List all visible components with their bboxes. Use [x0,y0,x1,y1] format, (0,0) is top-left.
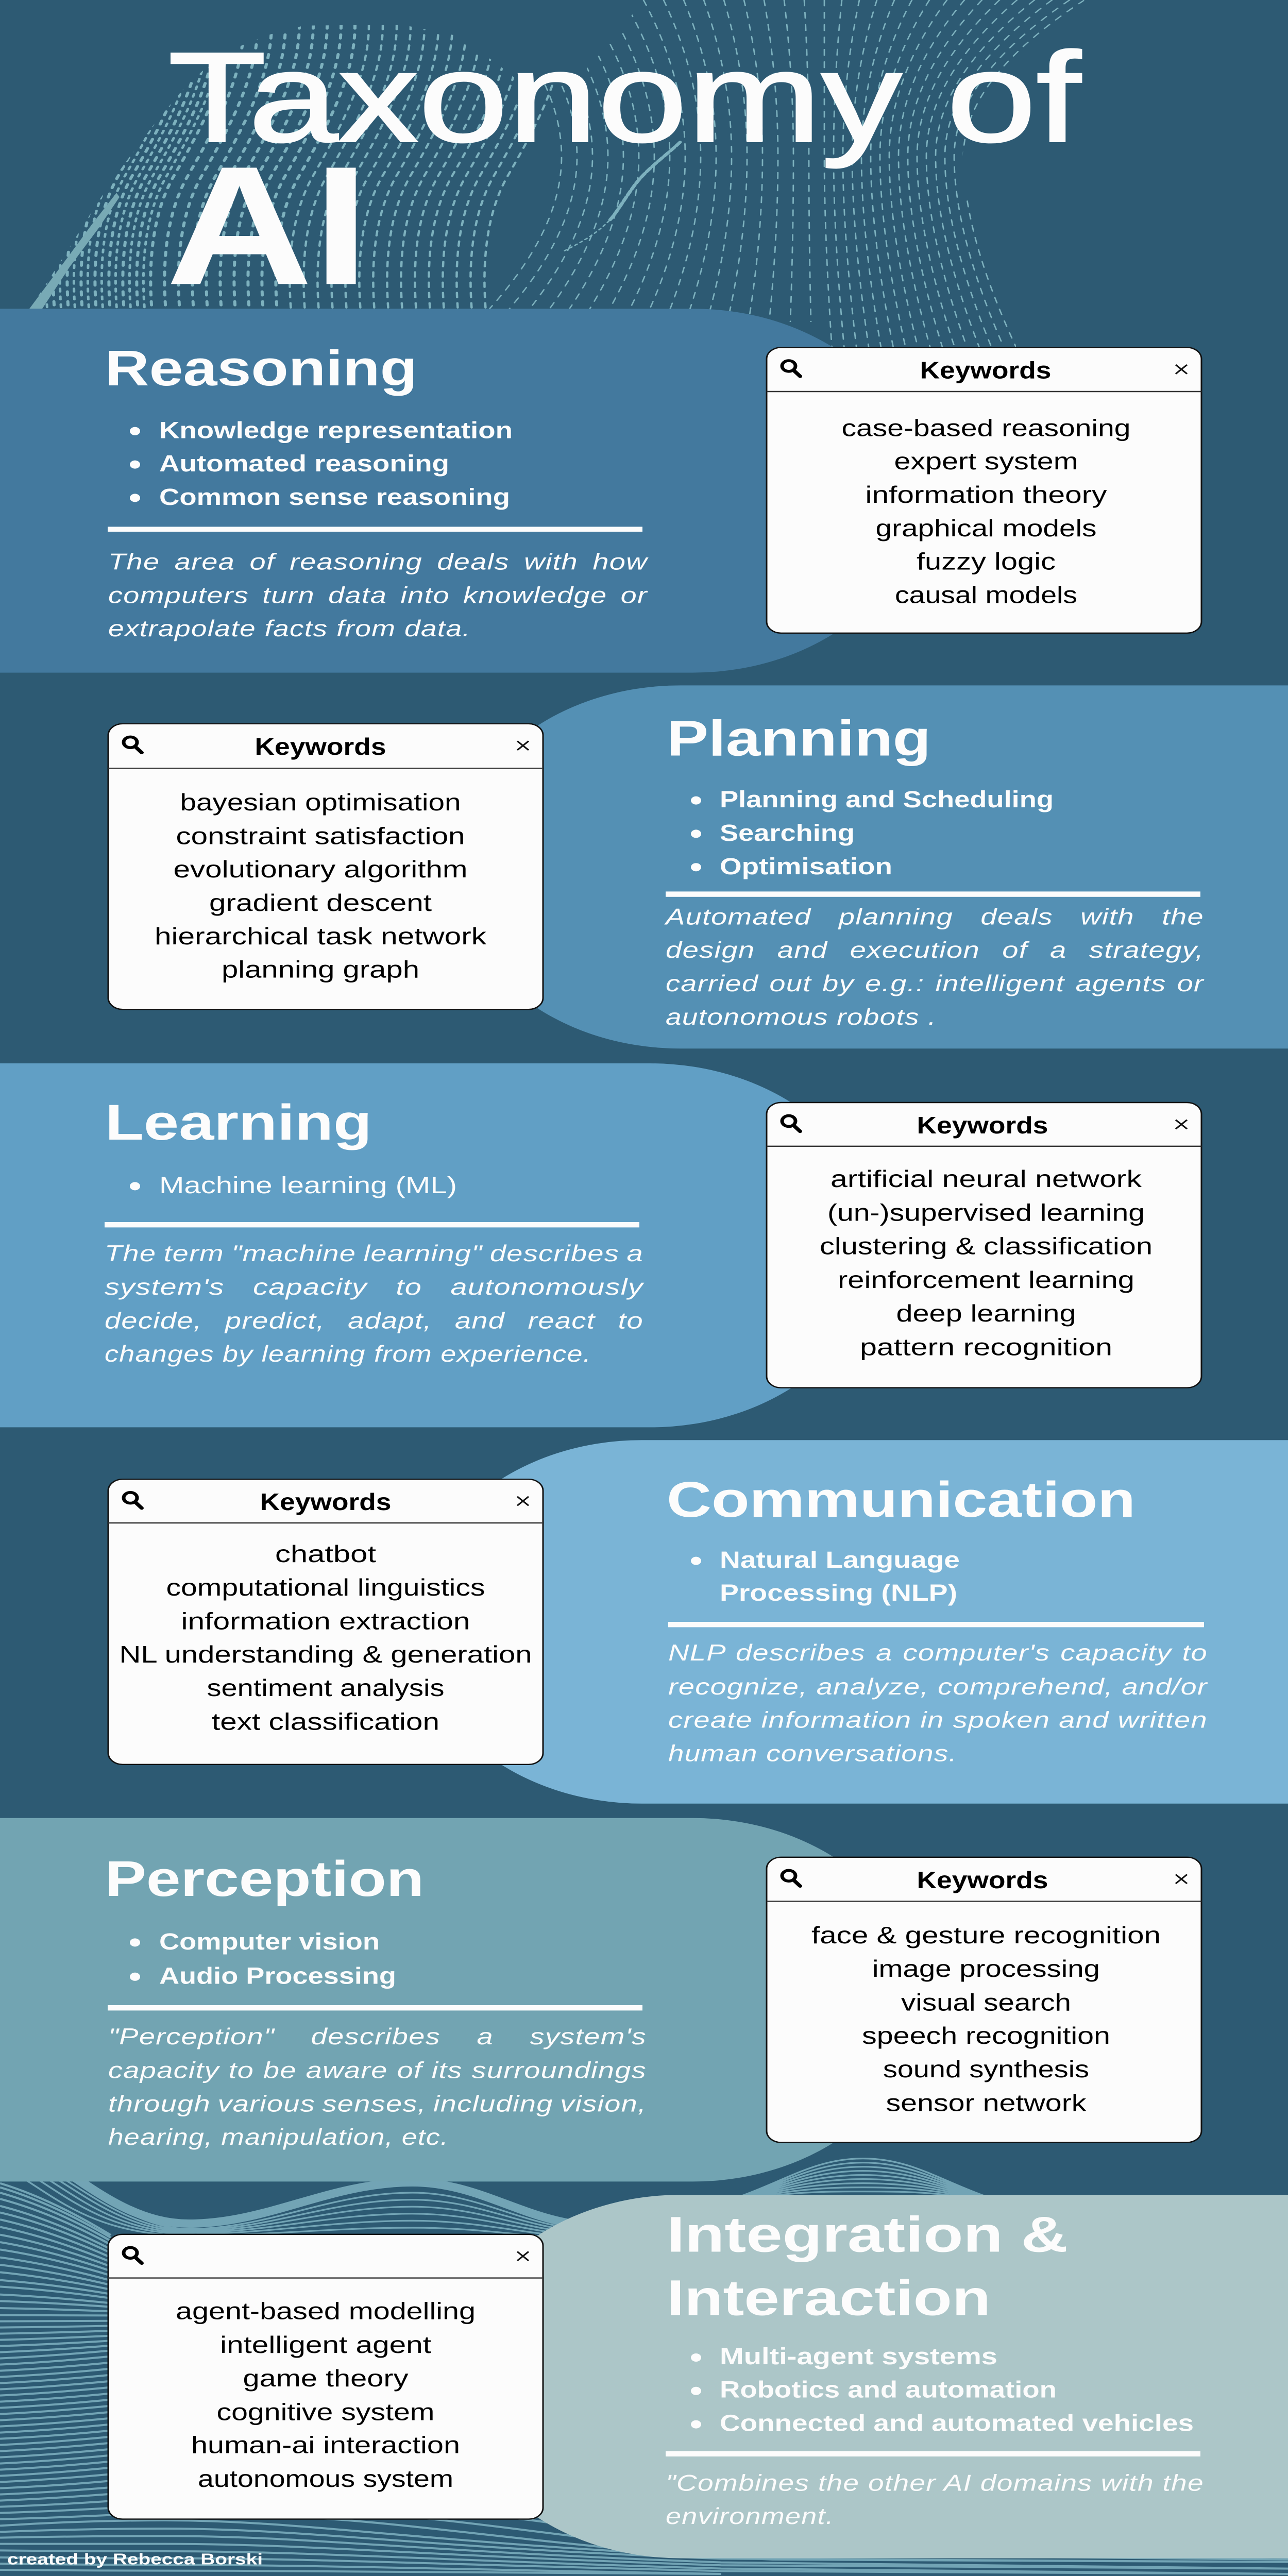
keyword list: hierarchical task network [155,923,487,950]
bullet list: perception [130,1928,396,1989]
bullet list: reasoning [130,417,513,510]
keyword list [176,2298,476,2493]
integration background shape [454,2195,1288,2558]
keyword list: speech recognition [862,2023,1110,2049]
keyword list: image processing [872,1955,1100,1982]
bullet list: communication: Natural Language [720,1547,960,1573]
divider [108,527,642,532]
icon: close [1176,1120,1187,1129]
keywords box: integration [108,2234,543,2519]
bullet list: integration [691,2343,1194,2436]
icon: close [517,1497,529,1505]
keyword list: gradient descent [209,889,432,917]
keyword list: deep learning [896,1300,1076,1327]
keyword list: intelligent agent [220,2332,431,2359]
keywords heading: Keywords [260,1489,392,1516]
keyword list [155,789,487,983]
keywords box: communication [108,1479,543,1765]
keywords box: planning [108,724,543,1009]
icon: search [782,361,800,376]
keyword list: information theory [866,481,1107,509]
learning background shape [0,1063,878,1427]
bullet list: planning [691,786,1054,879]
heading: integration and interaction [667,2207,1068,2326]
wave lines: second crest [742,2158,984,2195]
description: perception: capacity to be aware of its surroundings [108,2057,647,2083]
bullet list: planning: Searching [720,819,855,846]
icon: search [124,1493,142,1508]
keyword list: clustering & classification [820,1233,1153,1260]
keyword list: graphical models [875,515,1096,541]
divider [668,1622,1204,1627]
description: integration [666,2470,1204,2529]
panel: learning [0,1063,878,1427]
keyword list: visual search [901,1989,1071,2016]
bullet list: integration: Connected and automated vehicles [720,2410,1194,2436]
keyword list: bayesian optimisation [180,789,461,816]
left spine of the wave mesh [29,193,120,309]
keyword list: autonomous system [198,2466,453,2493]
description: learning: system's capacity to autonomously [105,1274,645,1300]
description: integration: environment. [666,2503,834,2529]
keywords heading: Keywords [255,733,386,760]
heading: integration and interaction: Integration & [667,2207,1068,2263]
keyword list: game theory [243,2365,409,2392]
description: learning: changes by learning from experience. [105,1341,591,1367]
description: perception [108,2023,647,2150]
description: planning: design and execution of a strategy, [666,937,1204,963]
icon: search [124,2247,142,2263]
keywords box: learning [767,1103,1201,1388]
keyword list: fuzzy logic [917,548,1056,575]
bullet list: reasoning: Common sense reasoning [159,483,510,510]
bullet list: reasoning: Automated reasoning [159,450,449,477]
wave lines: crest above the keywords box [73,2181,568,2228]
description: communication: NLP describes a computer's capacity to [668,1640,1208,1666]
heading: reasoning: Reasoning [105,341,417,396]
keyword list: expert system [894,448,1078,475]
description: learning [105,1240,645,1367]
description: reasoning [108,549,649,641]
description: perception: through various senses, including vision, [108,2091,647,2116]
keyword list: causal models [895,582,1077,608]
bullet list: learning: Machine learning (ML) [159,1172,457,1198]
description: reasoning: The area of reasoning deals with how [108,549,649,574]
divider [666,2451,1200,2456]
heading: communication: Communication [667,1472,1136,1528]
title: AI [166,131,369,320]
keyword list [820,1165,1153,1361]
description: planning [664,904,1205,1030]
description: communication [668,1640,1208,1766]
keyword list: (un-)supervised learning [827,1199,1145,1226]
description: perception: "Perception" describes a system's [108,2023,647,2049]
panel: planning [453,685,1288,1048]
icon: close [517,2251,529,2261]
description: communication: human conversations. [668,1740,957,1766]
credit: created by Rebecca Borski [7,2551,263,2568]
divider [105,1222,639,1227]
keywords box: reasoning [767,347,1201,633]
keyword list: artificial neural network [831,1165,1142,1193]
description: reasoning: computers turn data into knowledge or [108,582,648,608]
description: integration: "Combines the other AI domains with the [666,2470,1204,2496]
description: perception: hearing, manipulation, etc. [108,2124,449,2150]
divider [108,2005,642,2010]
panel: reasoning [0,309,920,673]
keyword list: constraint satisfaction [176,823,465,850]
keyword list: human-ai interaction [191,2432,460,2459]
icon: search [782,1870,800,1886]
description: learning: decide, predict, adapt, and react to [105,1308,643,1333]
communication background shape [415,1440,1288,1804]
bullet list: perception: Audio Processing [159,1962,396,1989]
description: communication: create information in spoken and written [668,1707,1208,1733]
keyword list: face & gesture recognition [811,1922,1161,1949]
bullet list: planning: Optimisation [720,853,892,879]
bullet list: communication [691,1547,960,1606]
description: learning: The term "machine learning" describes a [105,1240,643,1266]
heading: planning: Planning [667,710,931,767]
icon: search [124,737,142,753]
icon: close [517,741,529,750]
keyword list: computational linguistics [166,1574,485,1601]
heading: learning: Learning [105,1095,372,1150]
keyword list: sentiment analysis [207,1674,445,1702]
bullet list: integration: Robotics and automation [720,2376,1057,2402]
bullet list: planning: Planning and Scheduling [720,786,1054,812]
keyword list [811,1922,1161,2116]
keyword list: agent-based modelling [176,2298,476,2325]
panel: perception [0,1818,920,2181]
wave lines: left strip [0,2183,111,2519]
wave lines: bottom band [0,2514,1288,2574]
bullet list: reasoning: Knowledge representation [159,417,513,443]
wave lines background [0,2159,1288,2574]
description: communication: recognize, analyze, comprehend, and/or [668,1673,1208,1700]
description: planning: carried out by e.g.: intelligent agents or [666,970,1205,996]
keyword list: evolutionary algorithm [173,856,467,883]
keyword list: reinforcement learning [838,1266,1134,1294]
keywords heading: Keywords [917,1112,1048,1139]
keyword list: text classification [212,1708,439,1735]
panel: communication [415,1440,1288,1804]
keywords box: perception [767,1857,1201,2142]
keyword list [842,415,1130,608]
dotted wave mesh background [39,0,1084,350]
heading: perception: Perception [105,1851,424,1907]
keyword list: case-based reasoning [842,415,1131,442]
keywords heading: Keywords [917,1867,1048,1893]
bullet list: integration: Multi-agent systems [720,2343,997,2369]
title: Taxonomy of [168,26,1081,170]
description: reasoning: extrapolate facts from data. [108,616,471,641]
keyword list: chatbot [275,1540,376,1568]
planning background shape [453,685,1288,1048]
reasoning background shape [0,309,920,673]
keyword list: sound synthesis [883,2056,1089,2083]
heading: integration and interaction: Interaction [667,2270,991,2326]
keyword list: sensor network [886,2090,1087,2116]
panel: integration and interaction [454,2195,1288,2558]
keyword list: NL understanding & generation [119,1641,532,1668]
icon: close [1176,1874,1187,1884]
keyword list: cognitive system [216,2399,434,2426]
perception background shape [0,1818,920,2181]
bullet list: perception: Computer vision [159,1928,380,1955]
icon: close [1176,365,1187,374]
keyword list: pattern recognition [860,1334,1112,1361]
divider [666,891,1200,897]
description: planning: Automated planning deals with the [664,904,1204,929]
title [166,26,1081,320]
icon: search [782,1116,800,1131]
keywords heading: Keywords [920,357,1051,384]
description: planning: autonomous robots . [666,1004,937,1030]
keyword list [119,1540,532,1735]
keyword list: planning graph [222,956,419,983]
bullet list: communication: Processing (NLP) [720,1580,957,1606]
keyword list: information extraction [181,1608,470,1635]
